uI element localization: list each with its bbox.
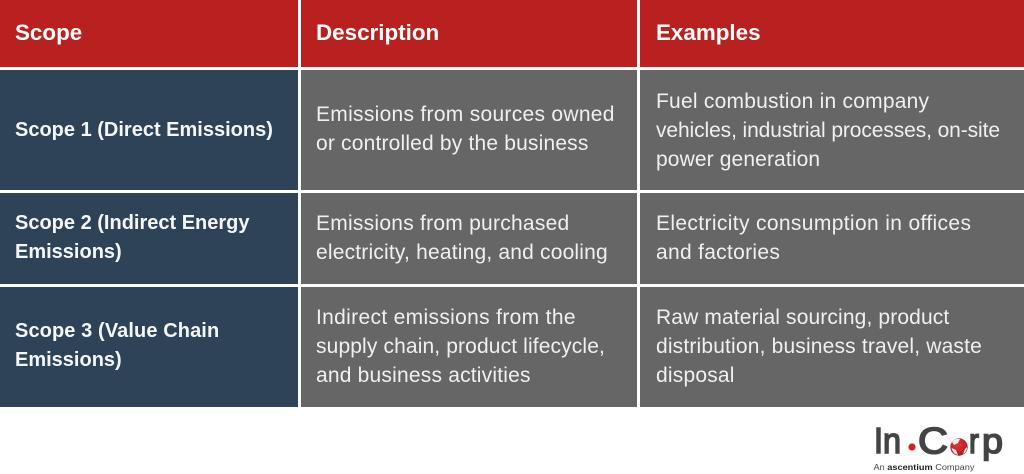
row 3 examples: Raw material sourcing, product (656, 306, 949, 329)
logo wordmark: In (874, 420, 901, 461)
row 1 examples: power generation (656, 148, 820, 171)
header cell: Description: Description (316, 20, 439, 45)
row 1 description: or controlled by the business (316, 132, 589, 155)
row 2 scope (0, 193, 298, 284)
row 3 description: supply chain, product lifecycle, (316, 335, 605, 358)
row 3 description: Indirect emissions from the (316, 306, 576, 329)
row 1 examples (640, 70, 1024, 190)
row 3 scope: Scope 3 (Value Chain (15, 320, 219, 342)
row 2 description: Emissions from purchased (316, 212, 569, 235)
row 3 description: and business activities (316, 364, 531, 387)
row 2 scope: Emissions) (15, 241, 122, 263)
row 2 description: electricity, heating, and cooling (316, 241, 608, 264)
row 3 scope: Emissions) (15, 349, 122, 371)
row 1 examples: Fuel combustion in company (656, 90, 929, 113)
row 3 examples (640, 287, 1024, 407)
logo wordmark: p (982, 422, 1003, 461)
row 3 scope (0, 287, 298, 407)
logo wordmark: C (918, 420, 948, 462)
row 2 examples: Electricity consumption in offices (656, 212, 971, 235)
row 2 examples: and factories (656, 241, 780, 264)
logo wordmark (874, 420, 1003, 462)
row 1 scope: Scope 1 (Direct Emissions) (15, 119, 273, 141)
row 1 scope (0, 70, 298, 190)
row 1 description (301, 70, 637, 190)
logo: InCorp (874, 420, 1003, 472)
row 2 scope: Scope 2 (Indirect Energy (15, 212, 250, 234)
header cell: Examples: Examples (656, 20, 761, 45)
row 3 description (301, 287, 637, 407)
row 1 description: Emissions from sources owned (316, 103, 615, 126)
logo wordmark: r (969, 422, 979, 461)
row 1 examples: vehicles, industrial processes, on-site (656, 119, 1000, 142)
row 3 examples: distribution, business travel, waste (656, 335, 982, 358)
row 2 examples (640, 193, 1024, 284)
row 2 description (301, 193, 637, 284)
header cell: Examples (640, 0, 1024, 67)
header cell: Description (301, 0, 637, 67)
header cell: Scope (0, 0, 298, 67)
logo tagline: An ascentium Company (874, 462, 975, 472)
header cell: Scope: Scope (15, 20, 82, 45)
row 3 examples: disposal (656, 364, 735, 387)
logo globe (950, 438, 968, 456)
